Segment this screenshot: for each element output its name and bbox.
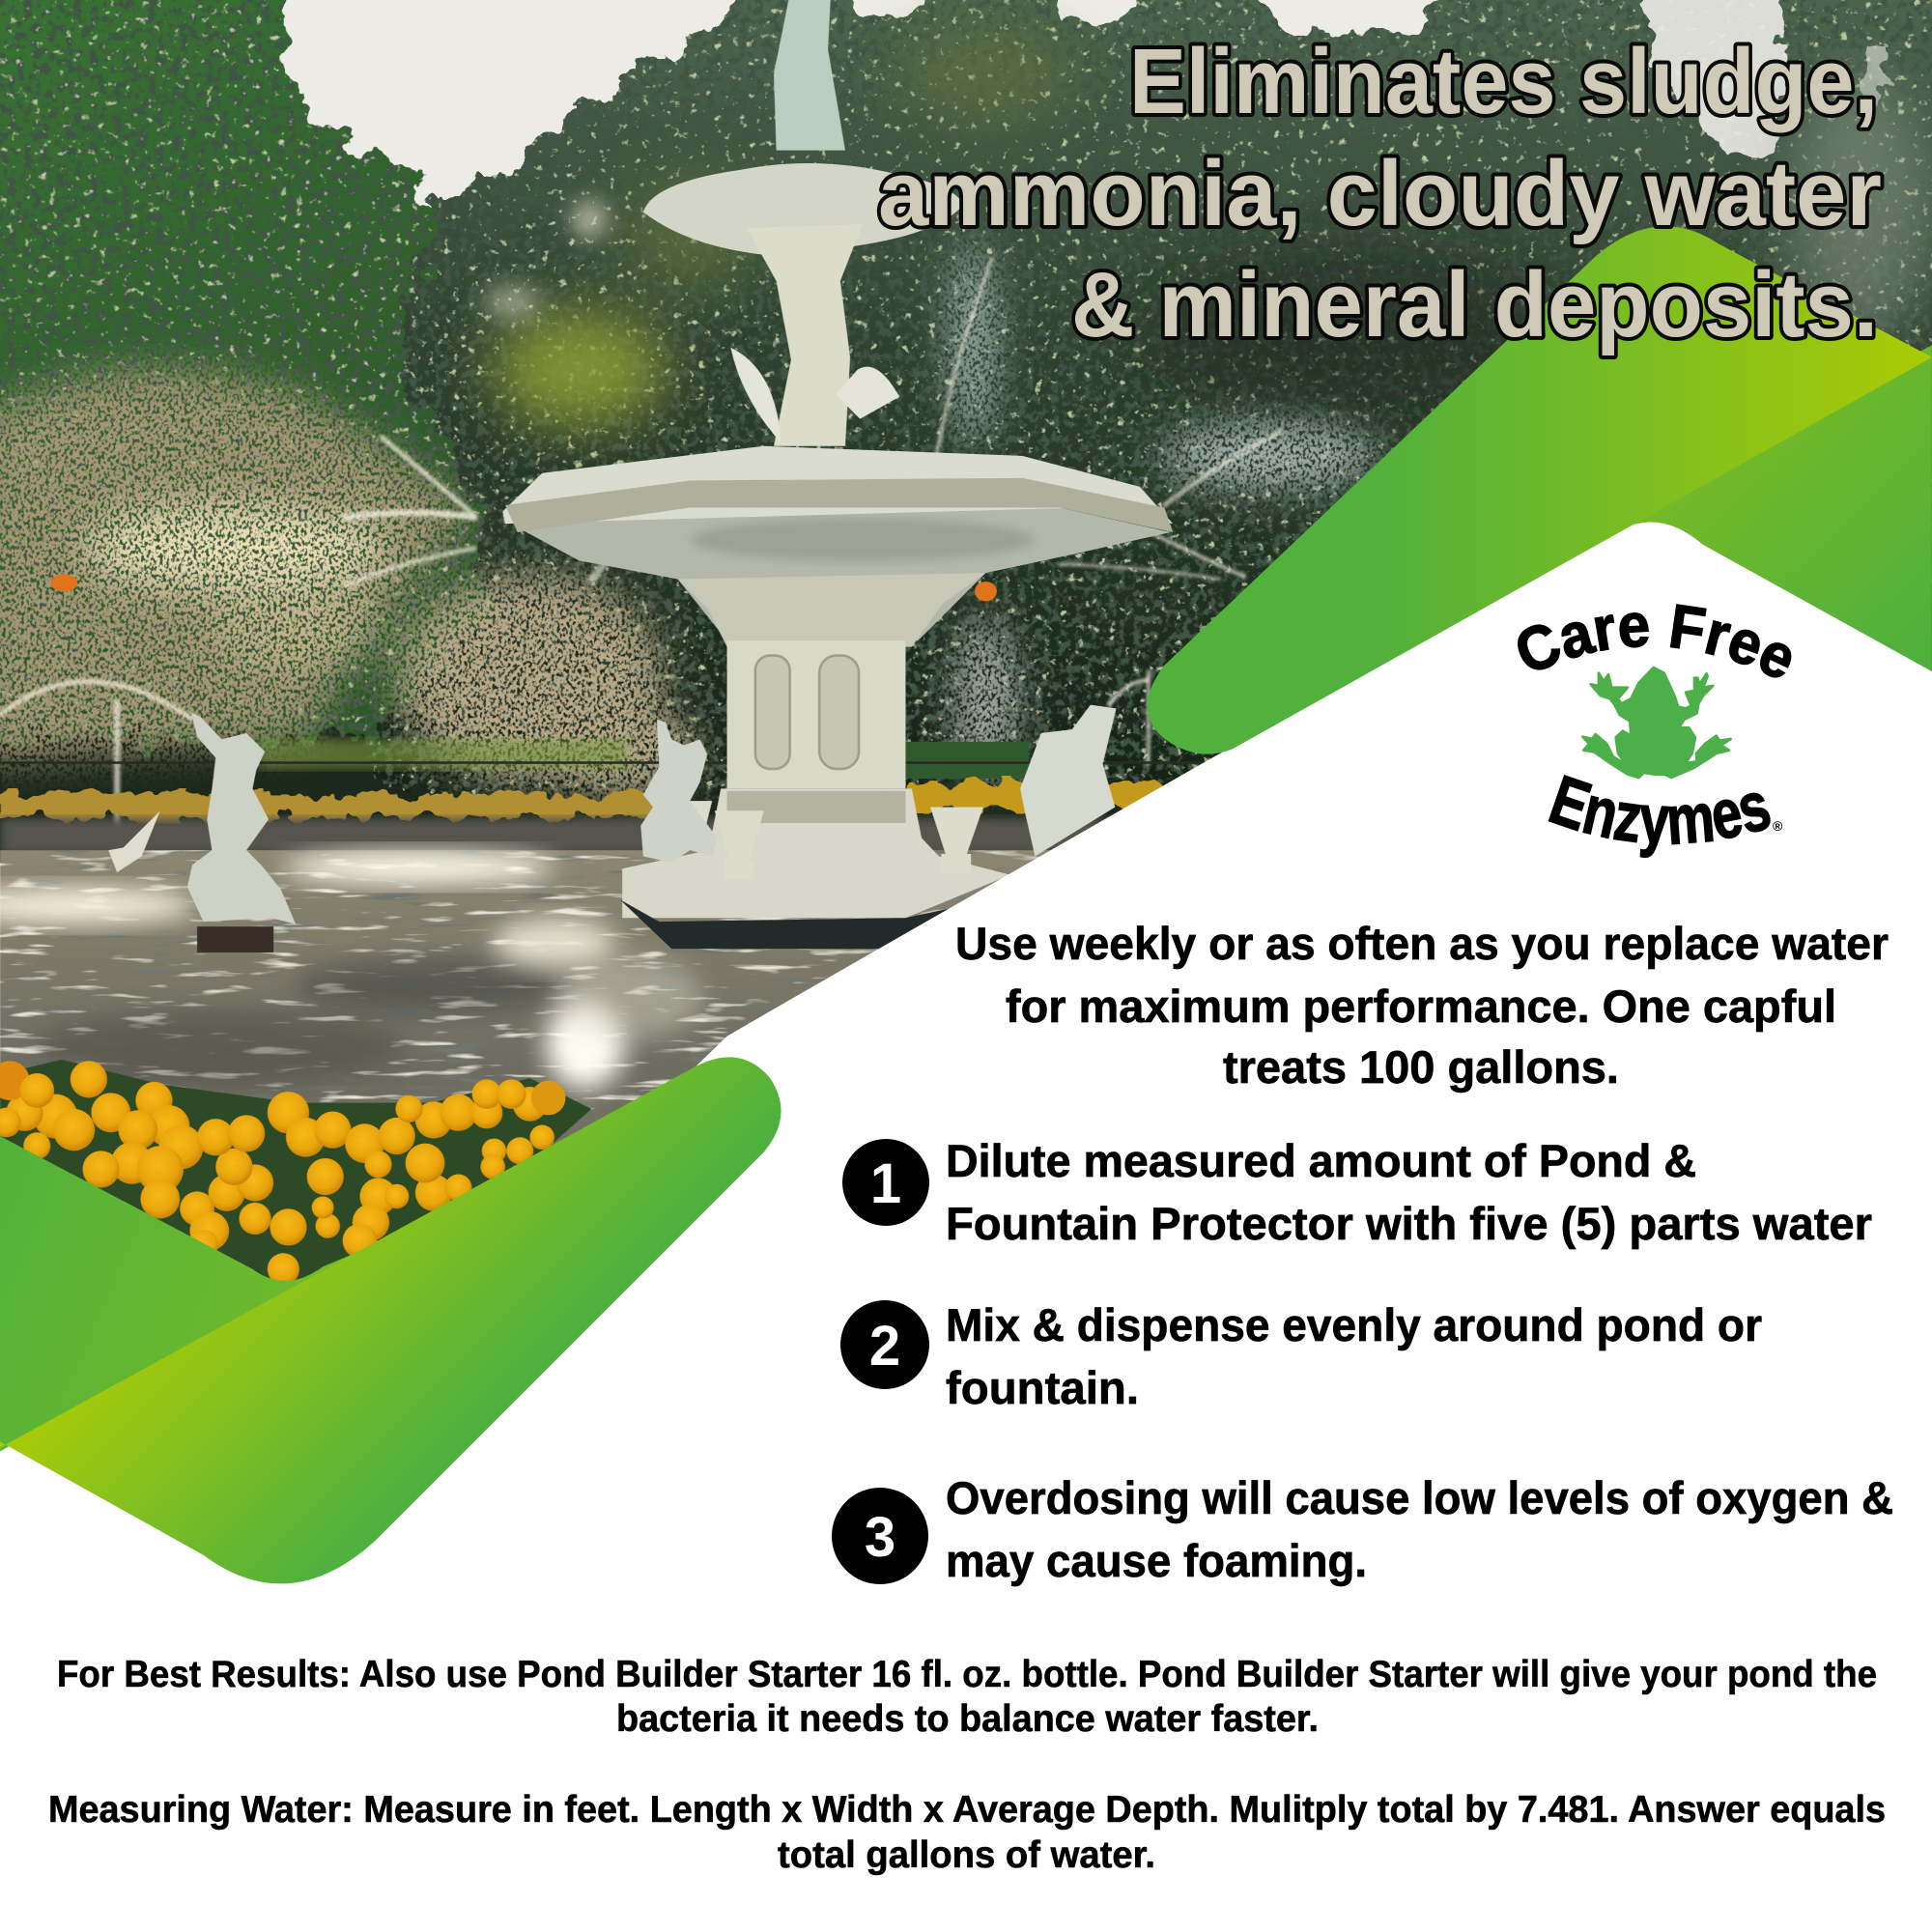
upper statue [774,0,845,151]
statue: figure with horn right [1020,705,1117,856]
step 2 text [946,1299,1762,1413]
shape: top-right green chevron [1148,226,1932,754]
step 3 text [946,1472,1893,1586]
bird wings [730,348,899,443]
logo text: Enzymes: Enzymes [1548,775,1771,858]
statue: small swan left [108,810,160,872]
step 1 text: Fountain Protector with five (5) parts water [946,1198,1872,1249]
shape: bottom-left green chevron [0,1057,781,1583]
step 3 [832,1472,1893,1586]
pedestal [727,640,905,788]
number badge 2 [840,1300,929,1389]
text block: usage intro: treats 100 gallons. [1223,1041,1619,1093]
number badge 1: 1 [870,1152,901,1215]
step 1 [842,1135,1872,1249]
garden: hedge and flower strip [0,739,1233,855]
text block: for best results: bacteria it needs to balance water faster. [616,1698,1319,1740]
logo text: Care Free: Care Free [1518,604,1791,678]
number badge 3 [832,1488,928,1584]
lamps [50,574,997,601]
dark garden background [0,518,1932,863]
urns [666,801,983,863]
upper bowl [643,163,963,256]
text block: measuring water: total gallons of water. [778,1834,1155,1876]
text block: usage intro: for maximum performance. One capful [1006,980,1836,1032]
statue: merman left [187,712,296,952]
icon: frog [1582,668,1731,778]
text block: measuring water [48,1789,1886,1876]
fountain [502,0,1173,949]
stem and reeds [747,224,863,446]
sun glare [484,202,604,317]
text block: usage intro [955,918,1889,1093]
sky patches in trees [844,0,1886,160]
lower bowl rim [502,446,1173,524]
headline: & mineral deposits. [1071,253,1878,356]
step 3 text: Overdosing will cause low levels of oxygen & [946,1472,1893,1523]
center and right trees [370,0,1932,788]
logo: Care Free Enzymes [1518,604,1791,858]
plinth [620,899,992,949]
number badge 1 [842,1139,929,1226]
text block: usage intro: Use weekly or as often as you replace water [955,918,1889,969]
panel: white content area [0,522,1932,1932]
flower bed [0,1060,591,1306]
step 1 text [946,1135,1872,1249]
step 2 [840,1299,1762,1413]
step 1 text: Dilute measured amount of Pond & [946,1135,1696,1186]
text block: for best results: For Best Results: Also use Pond Builder Starter 16 fl. oz. bottle. Pond Builder Starter will give your pond the [57,1654,1877,1695]
sunlit yellow-green foliage [493,25,1932,426]
left tree [0,0,493,739]
bowl underside [518,508,1171,640]
pool water [0,850,1233,1293]
base [622,788,1010,918]
photo: fountain in park [0,0,1932,1306]
number badge 3: 3 [865,1506,895,1569]
headline: ammonia, cloudy water [878,142,1882,245]
sky [0,0,1932,863]
text block: measuring water: Measuring Water: Measure in feet. Length x Width x Average Depth. Mulitply total by 7.481. Answer equals [48,1789,1886,1831]
step 2 text: fountain. [946,1362,1139,1413]
decorative band [505,478,1173,532]
text block: for best results [57,1654,1877,1740]
step 2 text: Mix & dispense evenly around pond or [946,1299,1762,1350]
capital [678,573,985,647]
statue: boy center [640,720,717,863]
step 3 text: may cause foaming. [946,1535,1367,1586]
registered mark: ® [1773,818,1783,834]
headline: Eliminates sludge, [1129,30,1878,133]
headline [878,30,1882,356]
panel: lower right green accent [1602,345,1932,671]
water jets [0,259,1282,838]
spray: left plumes [0,241,1380,796]
number badge 2: 2 [869,1315,900,1378]
shape: bottom-left dark green wedge [0,1136,370,1452]
